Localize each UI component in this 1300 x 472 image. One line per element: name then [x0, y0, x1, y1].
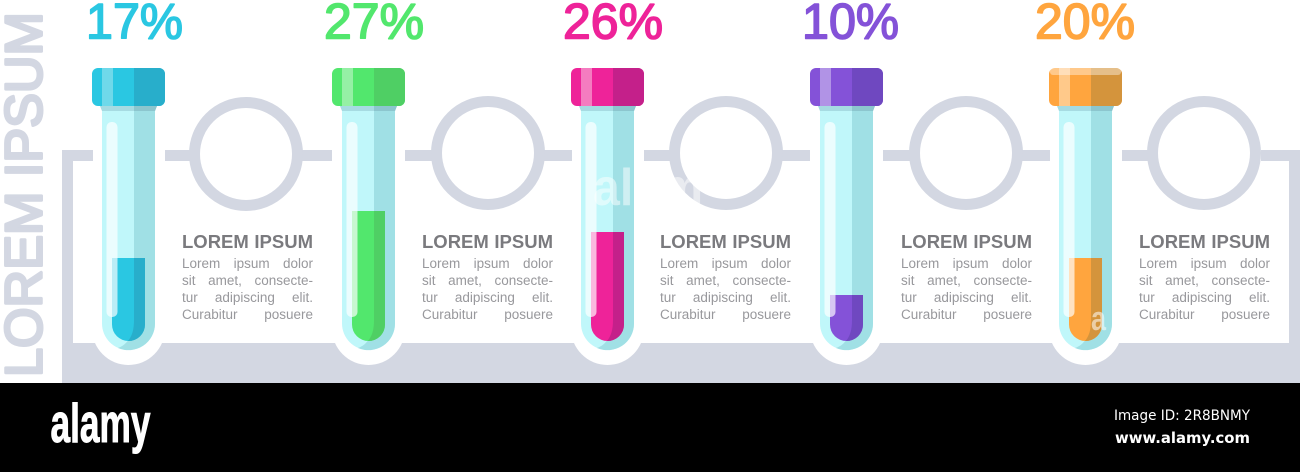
watermark centre: alam	[593, 159, 703, 217]
test tube 2 green	[332, 68, 405, 365]
image id: Image ID: 2R8BNMY	[1114, 408, 1250, 424]
test tube 5 orange	[1049, 68, 1122, 365]
text block 4: tur adipiscing elit.	[901, 290, 1032, 305]
text block 2: Lorem ipsum dolor	[422, 256, 553, 271]
text block 4: Curabitur posuere	[901, 307, 1032, 322]
text block 2: sit amet, consecte-	[422, 273, 553, 288]
alamy logo: alamy	[50, 392, 151, 454]
text block 3: Curabitur posuere	[660, 307, 791, 322]
text block 4	[901, 231, 1032, 322]
text block 2: tur adipiscing elit.	[422, 290, 553, 305]
text block 3	[660, 231, 791, 322]
circle 5	[1152, 102, 1256, 204]
text block 5: LOREM IPSUM	[1139, 231, 1270, 252]
text block 5	[1139, 231, 1270, 322]
frame	[62, 150, 1300, 383]
website: www.alamy.com	[1115, 429, 1250, 447]
text block 5: Curabitur posuere	[1139, 307, 1270, 322]
text block 3: Lorem ipsum dolor	[660, 256, 791, 271]
text block 4: Lorem ipsum dolor	[901, 256, 1032, 271]
watermark letter on orange liquid: a	[1091, 300, 1107, 338]
text block 5: Lorem ipsum dolor	[1139, 256, 1270, 271]
text block 4: sit amet, consecte-	[901, 273, 1032, 288]
circle 1	[194, 102, 298, 206]
circle 4	[914, 102, 1018, 204]
text block 5: tur adipiscing elit.	[1139, 290, 1270, 305]
circle 3	[674, 102, 778, 204]
text block 2: LOREM IPSUM	[422, 231, 553, 252]
text block 1: tur adipiscing elit.	[182, 290, 313, 305]
footer band	[0, 383, 1300, 472]
text block 3: tur adipiscing elit.	[660, 290, 791, 305]
text block 4: LOREM IPSUM	[901, 231, 1032, 252]
test tube 1 blue	[92, 68, 165, 365]
test tube 3 pink	[571, 68, 644, 365]
test tube 4 purple	[810, 68, 883, 365]
text block 5: sit amet, consecte-	[1139, 273, 1270, 288]
text block 1: Lorem ipsum dolor	[182, 256, 313, 271]
text block 1: sit amet, consecte-	[182, 273, 313, 288]
circle 2	[436, 102, 540, 204]
text block 2: Curabitur posuere	[422, 307, 553, 322]
text block 3: sit amet, consecte-	[660, 273, 791, 288]
text block 1: Curabitur posuere	[182, 307, 313, 322]
text block 3: LOREM IPSUM	[660, 231, 791, 252]
text block 2	[422, 231, 553, 322]
text block 1	[182, 231, 313, 322]
text block 1: LOREM IPSUM	[182, 231, 313, 252]
